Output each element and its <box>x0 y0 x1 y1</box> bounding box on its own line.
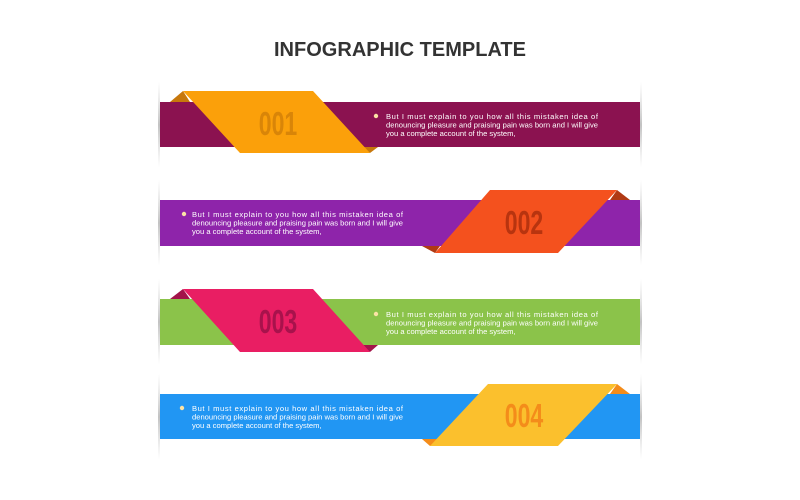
text block 2: denouncing pleasure and praising pain was born and I will give <box>192 218 403 228</box>
text block 3: But I must explain to you how all this mistaken idea of <box>386 310 599 319</box>
panel: item 003: 003 <box>259 304 297 341</box>
text block 4 <box>180 404 404 430</box>
text block 4: But I must explain to you how all this mistaken idea of <box>192 404 404 413</box>
ribbon: 003 <box>183 289 370 352</box>
ribbon: 002 <box>435 190 617 253</box>
text block 3: you a complete account of the system, <box>386 327 516 336</box>
panel: item 001 <box>158 82 642 168</box>
ribbon: 001 <box>183 91 370 153</box>
text block 2: you a complete account of the system, <box>192 227 322 236</box>
ribbon: 004 <box>430 384 617 446</box>
panel: item 003 <box>158 279 642 365</box>
text block 2: But I must explain to you how all this mistaken idea of <box>192 210 404 219</box>
panel: item 004: 004 <box>505 398 543 435</box>
text block 3: denouncing pleasure and praising pain was born and I will give <box>386 318 598 328</box>
text block 3 <box>374 310 599 336</box>
text block 4: denouncing pleasure and praising pain was born and I will give <box>192 412 403 422</box>
text block 1: denouncing pleasure and praising pain was born and I will give <box>386 120 598 130</box>
title: INFOGRAPHIC TEMPLATE <box>274 39 526 61</box>
text block 1: But I must explain to you how all this mistaken idea of <box>386 112 599 121</box>
text block 1 <box>374 112 599 138</box>
panel: item 002: 002 <box>505 205 543 242</box>
text block 4: you a complete account of the system, <box>192 421 322 430</box>
panel: item 004 <box>158 374 642 460</box>
panel: item 002 <box>158 180 642 266</box>
text block 2 <box>182 210 404 236</box>
text block 1: you a complete account of the system, <box>386 129 516 138</box>
panel: item 001: 001 <box>259 106 297 143</box>
